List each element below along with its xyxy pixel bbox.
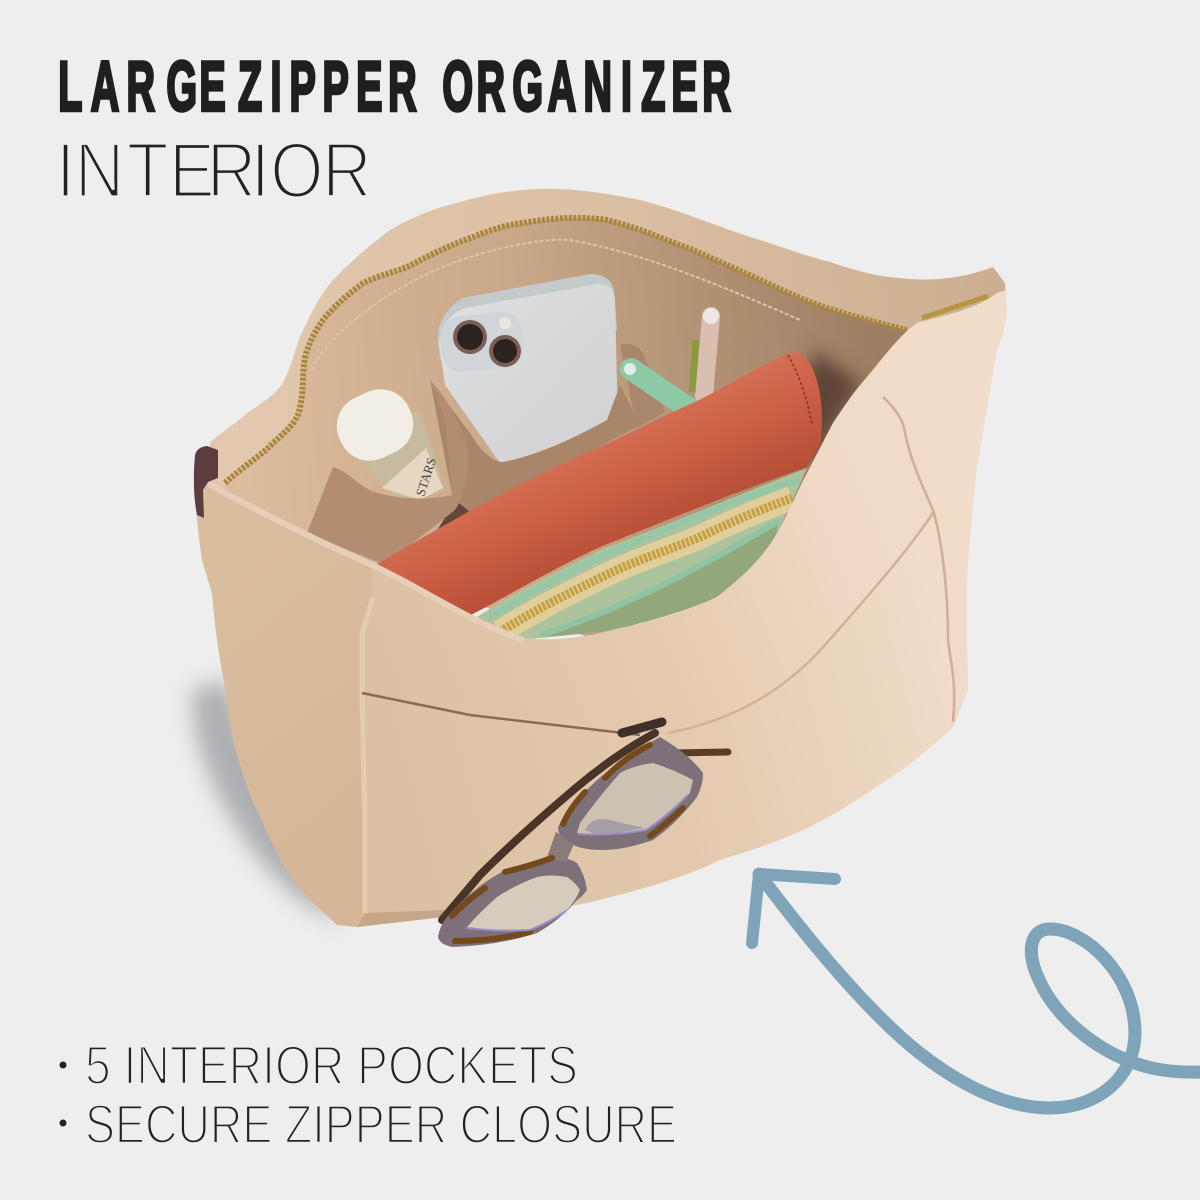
gold pen clip xyxy=(692,340,696,392)
lens reflection xyxy=(585,819,645,836)
pink pen cap xyxy=(703,308,719,324)
feature list xyxy=(60,1034,677,1155)
tortoise patches xyxy=(452,745,683,941)
left pocket xyxy=(307,380,468,565)
lens: upper xyxy=(558,737,703,850)
upper mint binding xyxy=(490,480,800,617)
interior dark corner xyxy=(790,350,862,470)
bullet: closure: SECURE ZIPPER CLOSURE xyxy=(85,1093,677,1155)
right pocket xyxy=(620,344,665,428)
temple arm: long xyxy=(442,733,655,920)
frame: upper xyxy=(558,737,703,850)
wallet stitching xyxy=(788,355,812,425)
leather panel xyxy=(545,522,778,637)
temple arm: short xyxy=(672,752,728,753)
bullet: pockets: 5 INTERIOR POCKETS xyxy=(85,1034,578,1096)
zipper xyxy=(225,218,907,483)
green pouch xyxy=(470,468,807,640)
arrow head xyxy=(752,874,835,943)
title: LARGE ZIPPER ORGANIZER xyxy=(58,48,731,127)
frame: bridge xyxy=(546,832,574,862)
subtitle: INTERIOR xyxy=(56,126,372,214)
lens: main xyxy=(453,320,487,354)
leather tab xyxy=(194,446,218,518)
organizer bag illustration xyxy=(192,189,1007,947)
lens: lower xyxy=(438,857,587,947)
lens: second xyxy=(489,335,521,367)
temple arm: hinge xyxy=(622,722,662,733)
bottle cap xyxy=(327,379,423,471)
sanitizer bottle xyxy=(327,379,445,505)
right seam xyxy=(883,397,954,722)
zipper pull xyxy=(922,296,988,318)
front body xyxy=(196,290,1007,927)
pocket opening seam: light xyxy=(668,513,933,733)
phone rim xyxy=(438,274,617,360)
exterior pocket panel xyxy=(362,513,955,917)
interior back wall xyxy=(225,218,907,640)
zipper tape xyxy=(500,498,792,632)
back flap xyxy=(208,189,1006,600)
glasses xyxy=(438,722,728,947)
frame: lower xyxy=(438,857,587,947)
pocket opening seam: dark xyxy=(362,693,640,735)
arrow squiggle xyxy=(759,874,1200,1108)
rim highlight xyxy=(208,484,523,640)
flash xyxy=(499,317,511,329)
arrow xyxy=(752,874,1200,1108)
side panel xyxy=(196,482,373,927)
pens xyxy=(624,308,719,408)
mint pen cap xyxy=(624,363,636,375)
lens edge highlights xyxy=(466,795,688,931)
side seam ridge xyxy=(362,597,373,913)
shadow xyxy=(192,680,340,925)
pink pen xyxy=(704,316,711,396)
bottle label: STARS xyxy=(413,456,439,498)
lining seam xyxy=(312,240,800,370)
phone xyxy=(438,274,618,470)
mint pen xyxy=(631,369,688,408)
dark gap behind pocket xyxy=(420,500,480,560)
zipper teeth xyxy=(500,498,792,632)
lower mint binding xyxy=(540,520,780,635)
camera bump xyxy=(438,310,526,374)
interior pockets xyxy=(307,344,665,565)
red wallet xyxy=(375,352,822,617)
centre pocket xyxy=(430,380,640,515)
base fold xyxy=(357,910,445,927)
